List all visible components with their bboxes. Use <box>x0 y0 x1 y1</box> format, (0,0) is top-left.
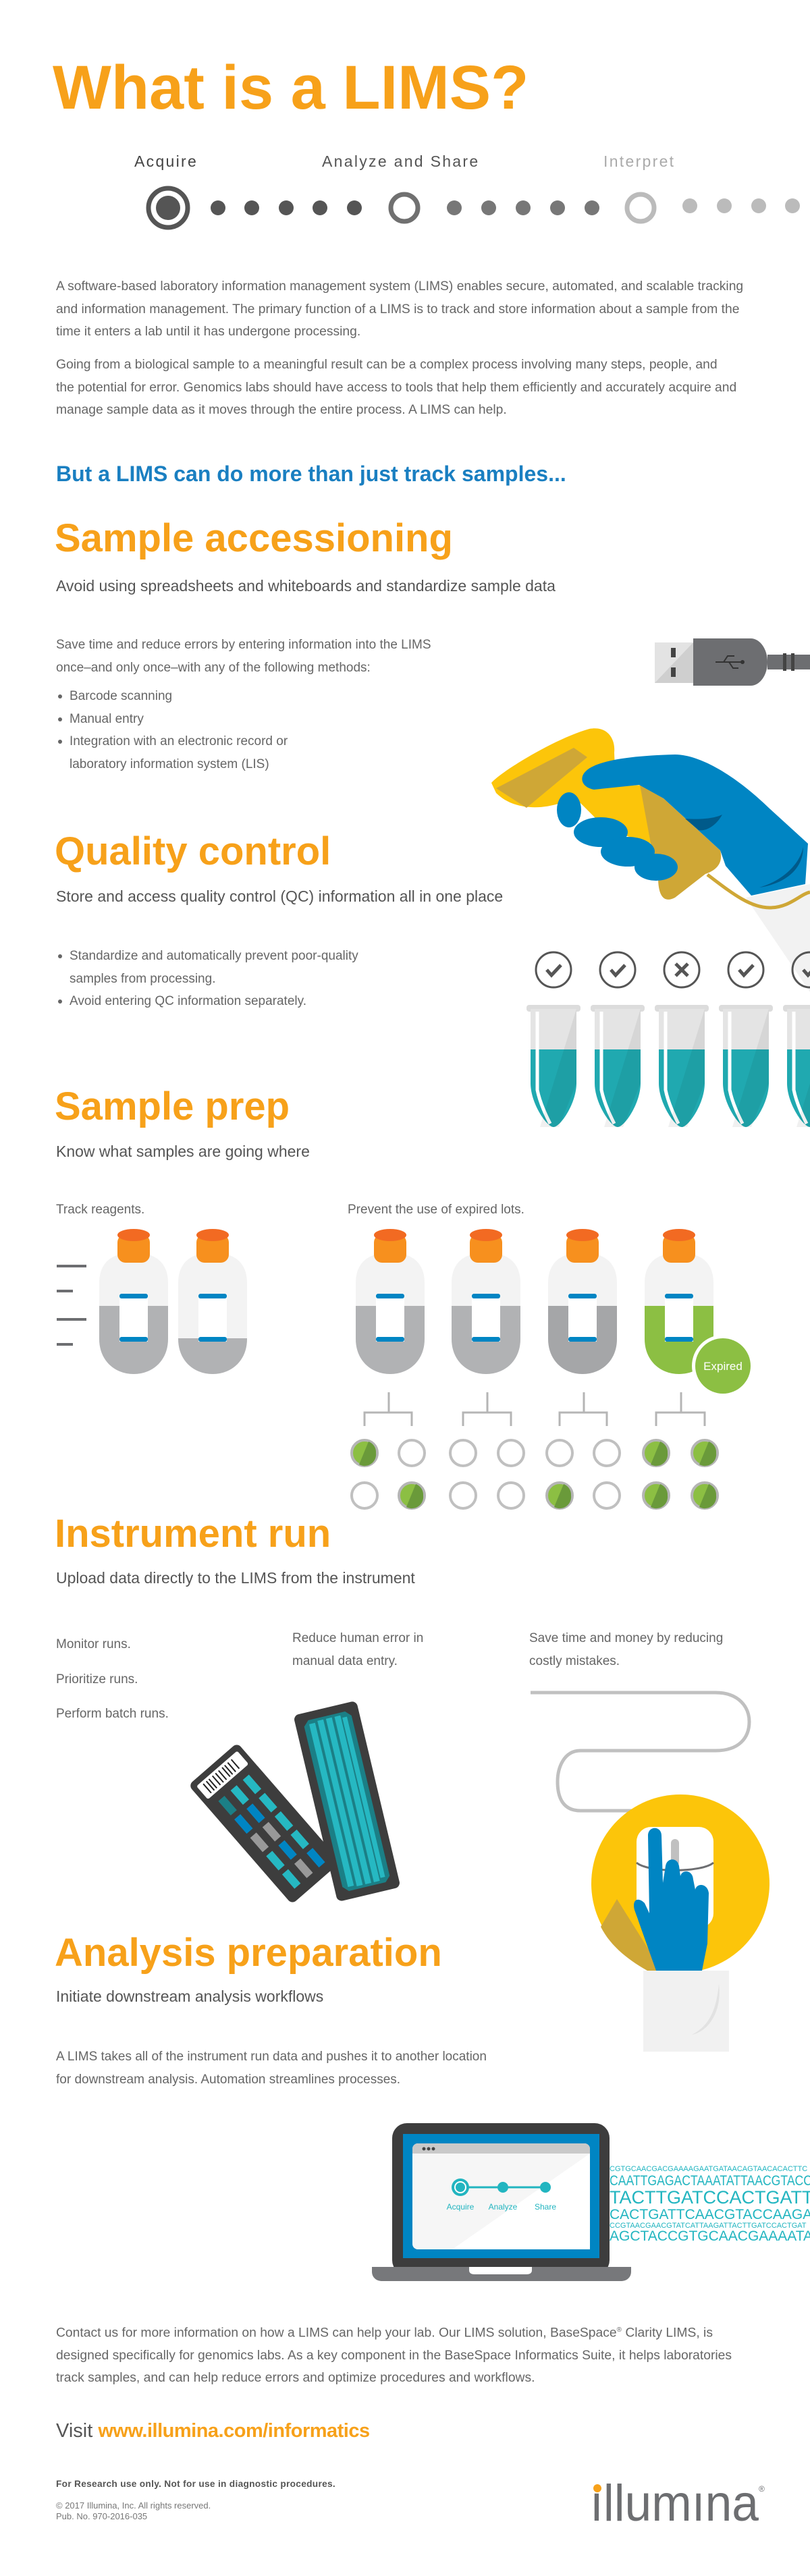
heading: analysis preparation: Analysis preparation <box>55 1931 442 1975</box>
text: qc bullets <box>58 949 358 1008</box>
dna sequence text: CCGTAACGAACGTATCATTAAGATTACTTGATCCACTGAT <box>610 2222 807 2230</box>
text: run column 2 <box>292 1631 423 1668</box>
text: contact: Contact us for more information on how a LIMS can help your lab. Our LIMS solution, BaseSpace® Clarity LIMS, is <box>56 2326 713 2340</box>
text: accessioning methods: once–and only once–with any of the following methods: <box>56 660 371 675</box>
text: analysis <box>56 2050 487 2087</box>
logo: illumina: ® <box>759 2484 765 2494</box>
text: run column 1: Prioritize runs. <box>56 1672 138 1686</box>
text: accessioning methods: Save time and reduce errors by entering information into the LIMS <box>56 638 431 652</box>
intro paragraph 2: Going from a biological sample to a meaningful result can be a complex process involving many steps, people, and <box>56 358 718 372</box>
footer copyright: © 2017 Illumina, Inc. All rights reserved. <box>56 2500 211 2511</box>
text: contact <box>56 2326 732 2385</box>
text: analysis: for downstream analysis. Automation streamlines processes. <box>56 2072 400 2087</box>
icon: mouse cable and hand <box>531 1693 770 2052</box>
badge: expired <box>692 1335 754 1397</box>
heading: quality control: Quality control <box>55 829 331 873</box>
footer copyright <box>56 2500 211 2521</box>
subtitle: sample prep: Know what samples are going where <box>56 1143 310 1160</box>
text: run column 3: costly mistakes. <box>529 1653 620 1668</box>
blue heading: But a LIMS can do more than just track samples... <box>56 462 566 486</box>
step labels: Acquire <box>134 153 198 170</box>
text: run column 1: Monitor runs. <box>56 1637 131 1651</box>
label: expired lots: Prevent the use of expired lots. <box>348 1203 524 1217</box>
dna sequence text <box>610 2165 810 2244</box>
icon: flow cells <box>188 1701 401 1904</box>
text: run column 3: Save time and money by reducing <box>529 1631 723 1645</box>
intro paragraph 2: manage sample data as it moves through the entire process. A LIMS can help. <box>56 403 507 417</box>
intro paragraph 2 <box>56 358 736 417</box>
footer copyright: Pub. No. 970-2016-035 <box>56 2511 147 2521</box>
progress steps <box>148 188 800 227</box>
text: qc bullets: samples from processing. <box>70 972 215 985</box>
heading: sample accessioning: Sample accessioning <box>55 516 453 560</box>
subtitle: instrument run: Upload data directly to the LIMS from the instrument <box>56 1569 415 1587</box>
icon: laptop: Share <box>535 2202 556 2212</box>
label: track reagents: Track reagents. <box>56 1203 144 1217</box>
sample dots grid <box>352 1440 718 1508</box>
icon: laptop: Analyze <box>489 2202 518 2212</box>
text: contact: designed specifically for genomics labs. As a key component in the BaseSpace Informatics Suite, it helps laboratories <box>56 2349 732 2363</box>
icons: qc check marks <box>536 952 810 987</box>
text: contact: track samples, and can help reduce errors and optimize procedures and workflows. <box>56 2371 535 2385</box>
text: accessioning methods: Integration with an electronic record or <box>70 734 288 748</box>
step labels: Interpret <box>603 153 675 170</box>
title: What is a LIMS? <box>53 53 529 122</box>
icon: laptop <box>372 2123 631 2281</box>
icon: laptop: Acquire <box>447 2202 475 2212</box>
icon: barcode scanner in gloved hand <box>491 728 810 992</box>
text: accessioning methods: Barcode scanning <box>70 689 172 703</box>
step labels: Analyze and Share <box>322 153 479 170</box>
intro paragraph 1 <box>56 279 743 339</box>
text: run column 2: Reduce human error in <box>292 1631 423 1645</box>
intro paragraph 1: time it enters a lab until it has undergone processing. <box>56 325 360 339</box>
subtitle: analysis preparation: Initiate downstream analysis workflows <box>56 1988 323 2005</box>
lot tree connectors <box>364 1392 705 1426</box>
icons: tubes <box>526 1005 810 1127</box>
text: accessioning methods <box>56 638 431 771</box>
dna sequence text: CGTGCAACGACGAAAAGAATGATAACAGTAACACACTTC <box>610 2165 807 2173</box>
footer disclaimer: For Research use only. Not for use in diagnostic procedures. <box>56 2479 335 2489</box>
heading: sample prep: Sample prep <box>55 1085 290 1128</box>
subtitle: sample accessioning: Avoid using spreadsheets and whiteboards and standardize sample data <box>56 577 556 595</box>
text: accessioning methods: laboratory information system (LIS) <box>70 757 269 771</box>
intro paragraph 1: and information management. The primary function of a LIMS is to track and store information about a sample from the <box>56 302 739 316</box>
subtitle: quality control: Store and access quality control (QC) information all in one place <box>56 887 503 905</box>
heading: instrument run: Instrument run <box>55 1512 331 1556</box>
text: run column 1: Perform batch runs. <box>56 1707 169 1721</box>
logo: illumina: ıllumına <box>590 2475 759 2532</box>
badge: expired: Expired <box>703 1360 742 1373</box>
text: qc bullets: Avoid entering QC information separately. <box>70 994 306 1008</box>
icons: reagent bottles <box>57 1229 713 1374</box>
text: run column 3 <box>529 1631 723 1668</box>
step labels <box>134 153 675 170</box>
text: qc bullets: Standardize and automatically prevent poor-quality <box>70 949 358 963</box>
text: run column 1 <box>56 1637 169 1721</box>
text: run column 2: manual data entry. <box>292 1653 398 1668</box>
text: analysis: A LIMS takes all of the instrument run data and pushes it to another location <box>56 2050 487 2064</box>
icon: usb plug <box>655 638 810 686</box>
visit link: Visit www.illumina.com/informatics <box>56 2420 370 2442</box>
text: accessioning methods: Manual entry <box>70 711 144 726</box>
intro paragraph 2: the potential for error. Genomics labs should have access to tools that help them efficiently and accurately acquire and <box>56 381 736 394</box>
intro paragraph 1: A software-based laboratory information management system (LIMS) enables secure, automated, and scalable tracking <box>56 279 743 294</box>
